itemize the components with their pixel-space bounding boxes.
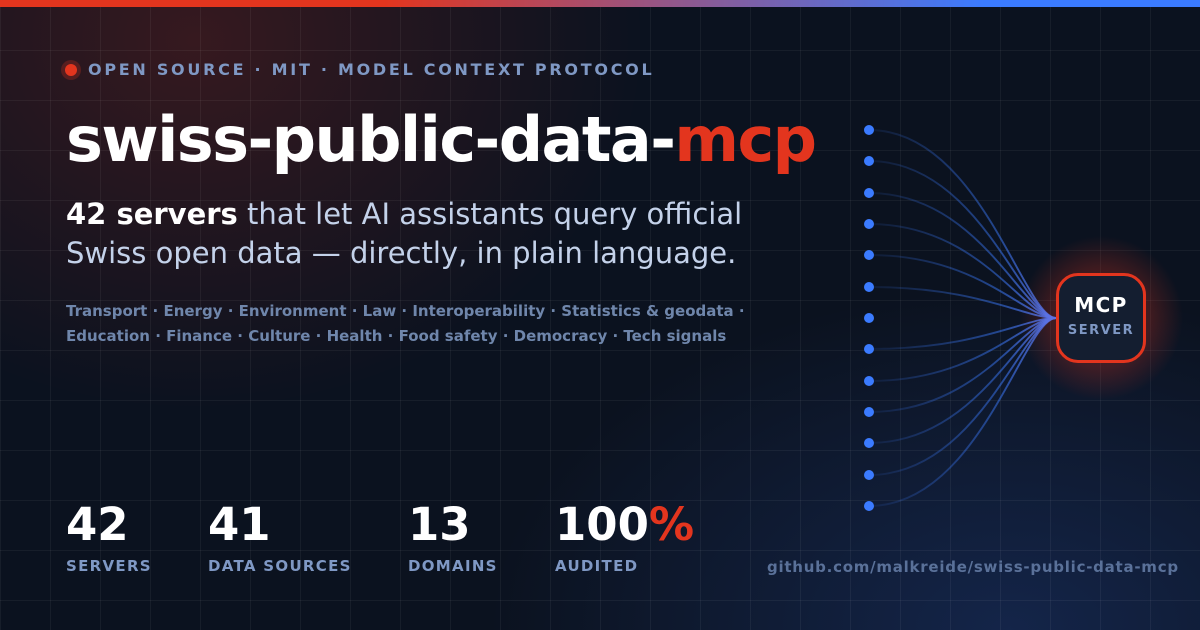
stat number: 41	[208, 498, 271, 551]
title: swiss-public-data-mcp	[66, 103, 815, 176]
mcp server box	[1056, 273, 1146, 363]
stat label: DATA SOURCES	[208, 557, 352, 575]
eyebrow label	[61, 60, 654, 80]
source dots	[864, 125, 874, 511]
subtitle: Swiss open data — directly, in plain language.	[66, 236, 736, 270]
domain list: Education · Finance · Culture · Health · Food safety · Democracy · Tech signals	[66, 327, 726, 345]
repository url: github.com/malkreide/swiss-public-data-mcp	[767, 558, 1179, 576]
subtitle: 42 servers that let AI assistants query official	[66, 197, 742, 231]
icon: status dot	[65, 64, 77, 76]
eyebrow text: OPEN SOURCE · MIT · MODEL CONTEXT PROTOCOL	[88, 60, 654, 79]
connection lines	[869, 130, 1056, 506]
stat: data sources	[208, 498, 352, 575]
server glow	[1019, 236, 1183, 400]
stat: audited	[555, 498, 694, 575]
stat label: SERVERS	[66, 557, 152, 575]
domain list	[66, 302, 745, 345]
stat label: DOMAINS	[408, 557, 498, 575]
domain list: Transport · Energy · Environment · Law · Interoperability · Statistics & geodata ·	[66, 302, 745, 320]
stat number: 13	[408, 498, 471, 551]
stat label: AUDITED	[555, 557, 638, 575]
server title: MCP	[1074, 293, 1128, 317]
server subtitle: SERVER	[1068, 323, 1134, 338]
stat: domains	[408, 498, 498, 575]
stat number: 100%	[555, 498, 694, 551]
subtitle	[66, 197, 742, 270]
stat: servers	[66, 498, 152, 575]
stat number: 42	[66, 498, 129, 551]
top gradient bar	[0, 0, 1200, 7]
